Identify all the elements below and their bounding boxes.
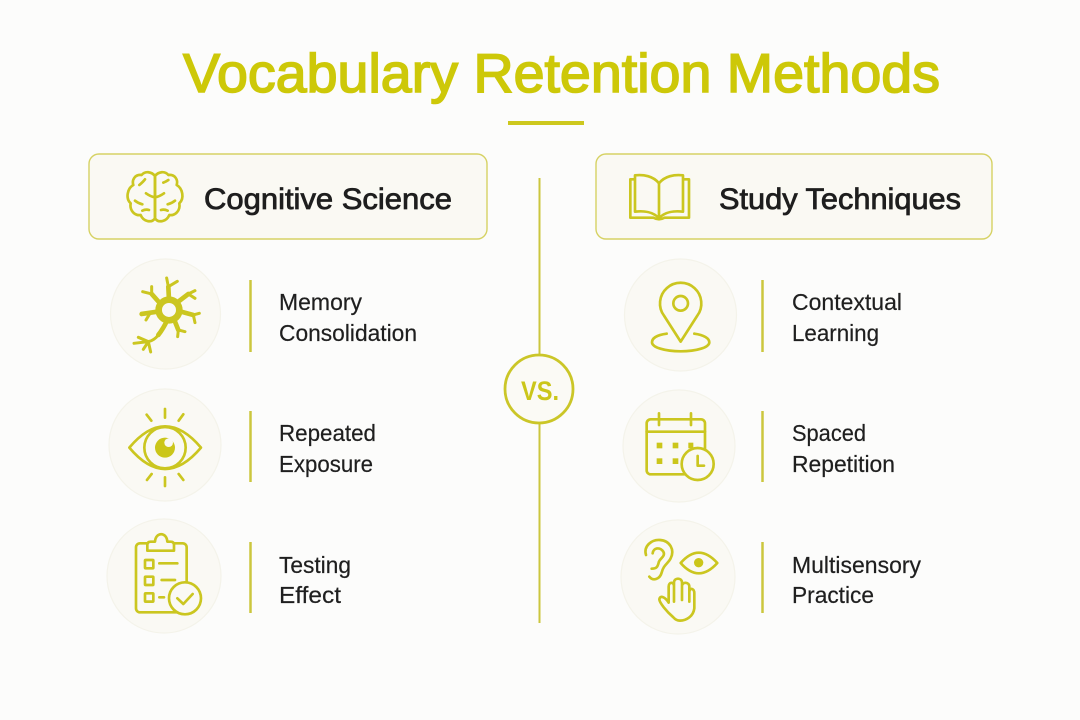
label: Exposure — [279, 451, 373, 477]
label: Testing — [279, 552, 351, 578]
heading: cognitive science: Cognitive Science — [204, 183, 452, 216]
item: repeated exposure — [109, 389, 376, 501]
label — [279, 552, 351, 608]
label: Learning — [792, 320, 879, 346]
label: Memory — [279, 289, 362, 315]
item: memory consolidation — [110, 259, 417, 369]
label — [792, 289, 902, 346]
heading: study techniques: Study Techniques — [719, 183, 961, 216]
label — [792, 552, 921, 608]
label: Multisensory — [792, 552, 921, 578]
label — [792, 420, 895, 477]
label — [279, 420, 376, 477]
label: Consolidation — [279, 320, 417, 346]
icon: brain — [128, 172, 182, 221]
label: Contextual — [792, 289, 902, 315]
icon: open book — [630, 175, 689, 219]
center divider with versus badge — [505, 178, 573, 623]
item: multisensory practice — [621, 520, 921, 634]
panel: study techniques header — [596, 154, 992, 239]
label: Practice — [792, 582, 874, 608]
icon: neuron — [134, 278, 199, 352]
title underline — [508, 121, 584, 125]
icon: clipboard with check — [136, 534, 201, 614]
icon: calendar with clock — [647, 413, 714, 480]
label: Repetition — [792, 451, 895, 477]
icon: eye with rays — [129, 409, 201, 486]
label: Effect — [279, 582, 341, 608]
item: spaced repetition — [623, 390, 895, 502]
title: Vocabulary Retention Methods — [183, 42, 940, 104]
panel: cognitive science header — [89, 154, 487, 239]
item: testing effect — [107, 519, 351, 633]
icon: location pin — [652, 283, 709, 351]
item: contextual learning — [624, 259, 902, 371]
label — [279, 289, 417, 346]
label: Spaced — [792, 420, 866, 446]
label: Repeated — [279, 420, 376, 446]
icon: ear, eye and hand — [645, 540, 717, 621]
center divider with versus badge: VS. — [521, 376, 559, 406]
